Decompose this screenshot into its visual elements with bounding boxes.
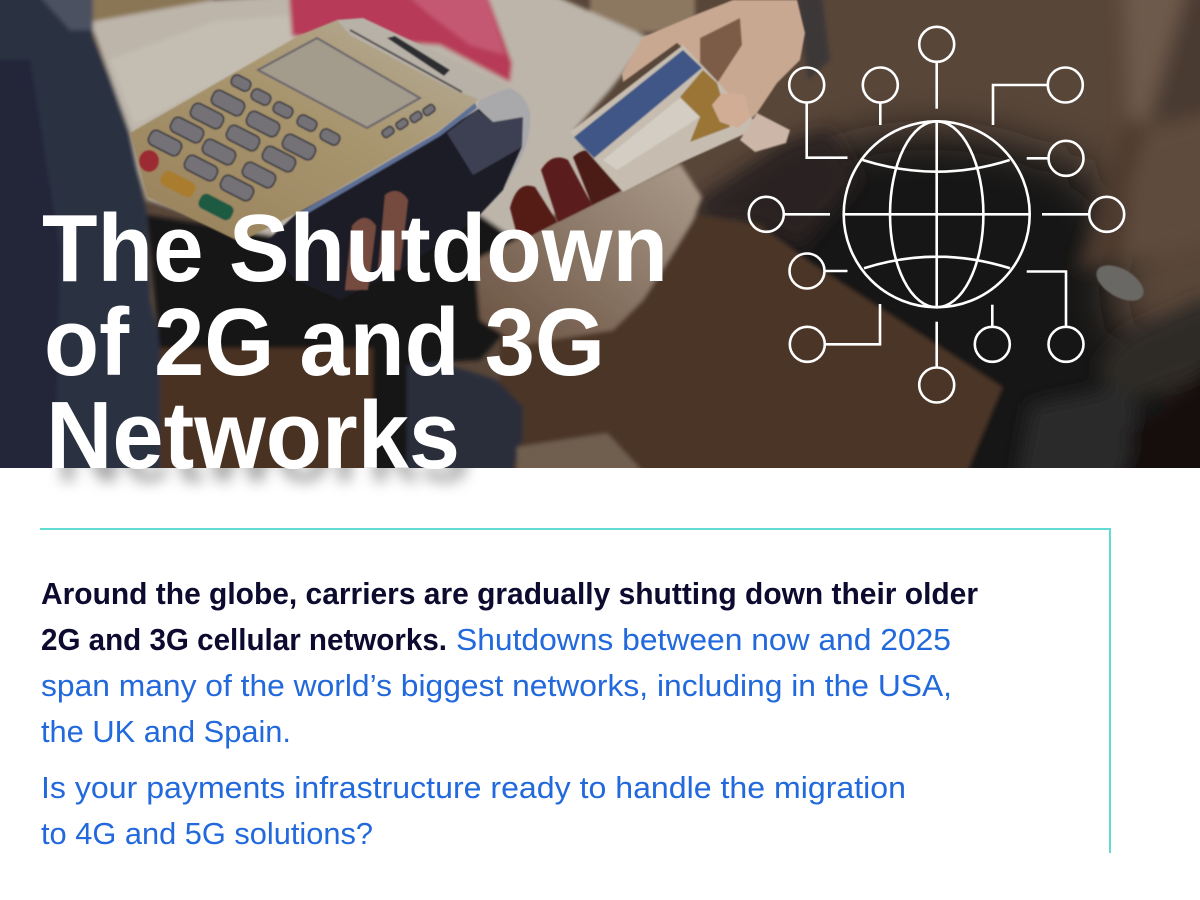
question xyxy=(41,770,906,851)
title xyxy=(42,195,668,489)
terminal xyxy=(265,108,525,300)
blue body sentence xyxy=(41,622,952,749)
title: of 2G and 3G xyxy=(44,289,605,396)
knob xyxy=(1090,258,1150,308)
bold lead sentence xyxy=(41,576,978,657)
blue body sentence: the UK and Spain. xyxy=(41,714,291,749)
card xyxy=(570,45,760,192)
question: Is your payments infrastructure ready to handle the migration xyxy=(41,770,906,805)
teal frame line xyxy=(40,528,1111,853)
question: to 4G and 5G solutions? xyxy=(41,816,373,851)
bold lead sentence: 2G and 3G cellular networks. xyxy=(41,622,447,657)
globe xyxy=(844,121,1030,307)
bold lead sentence: Around the globe, carriers are gradually shutting down their older xyxy=(41,576,978,611)
title: Networks xyxy=(46,382,460,489)
network nodes and connectors xyxy=(749,27,1124,403)
blue body sentence: Shutdowns between now and 2025 xyxy=(456,622,951,657)
blue body sentence: span many of the world’s biggest networks, including in the USA, xyxy=(41,668,952,703)
icon: globe network xyxy=(748,26,1126,404)
title: The Shutdown xyxy=(42,195,668,302)
upper hand xyxy=(622,0,805,127)
title shadow on white band: Networks xyxy=(46,382,460,489)
fingers under terminal xyxy=(345,218,376,290)
hero photo: payment terminal and card xyxy=(0,0,1200,468)
dark red fingers xyxy=(510,186,557,236)
